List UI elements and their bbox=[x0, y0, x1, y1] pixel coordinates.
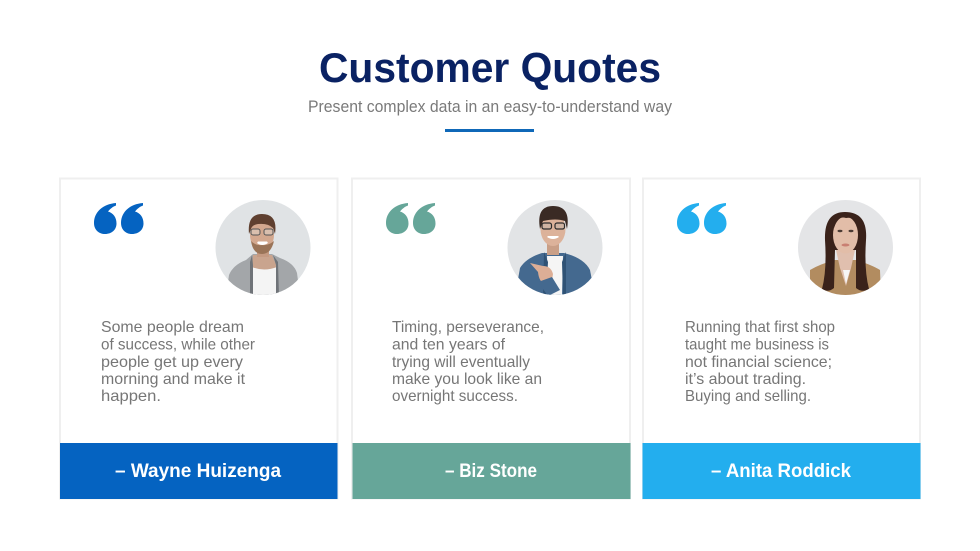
quote text: Running that first shop bbox=[685, 319, 835, 336]
title: Customer Quotes bbox=[319, 44, 661, 91]
quote text: trying will eventually bbox=[392, 354, 530, 371]
card frame bbox=[60, 178, 338, 498]
name bar bbox=[642, 443, 920, 499]
name bar: – Anita Roddick bbox=[711, 460, 851, 482]
icon: quotation mark bbox=[94, 203, 144, 234]
quote text: and ten years of bbox=[392, 336, 506, 354]
quote text bbox=[101, 319, 256, 405]
quote text: Some people dream bbox=[101, 319, 244, 336]
quote text bbox=[392, 319, 544, 405]
name bar bbox=[352, 443, 630, 499]
quote text: not financial science; bbox=[685, 354, 832, 371]
quote text: of success, while other bbox=[101, 336, 256, 354]
icon: quotation mark bbox=[677, 203, 726, 234]
quote text: Buying and selling. bbox=[685, 388, 811, 405]
name bar bbox=[60, 443, 338, 499]
panel: Anita Roddick quote bbox=[642, 178, 920, 499]
subtitle: Present complex data in an easy-to-understand way bbox=[308, 98, 673, 116]
quote text: make you look like an bbox=[392, 371, 542, 388]
icon: quotation mark bbox=[386, 203, 436, 234]
portrait: smiling man in grey blazer bbox=[215, 200, 311, 296]
quote text: happen. bbox=[101, 388, 161, 405]
title underline bbox=[445, 129, 534, 132]
card frame bbox=[352, 178, 630, 498]
panel: Biz Stone quote bbox=[352, 178, 630, 499]
quote text: it’s about trading. bbox=[685, 371, 806, 388]
portrait: man in denim shirt pointing bbox=[507, 200, 603, 296]
portrait: woman in tan blazer bbox=[797, 200, 894, 296]
quote text bbox=[685, 319, 835, 405]
quote text: taught me business is bbox=[685, 336, 829, 354]
quote text: overnight success. bbox=[392, 388, 518, 405]
quote text: morning and make it bbox=[101, 371, 246, 388]
panel: Wayne Huizenga quote bbox=[60, 178, 338, 499]
quote text: people get up every bbox=[101, 354, 243, 371]
name bar: – Biz Stone bbox=[445, 460, 537, 482]
name bar: – Wayne Huizenga bbox=[115, 460, 281, 482]
quote text: Timing, perseverance, bbox=[392, 319, 544, 336]
card frame bbox=[643, 178, 920, 498]
